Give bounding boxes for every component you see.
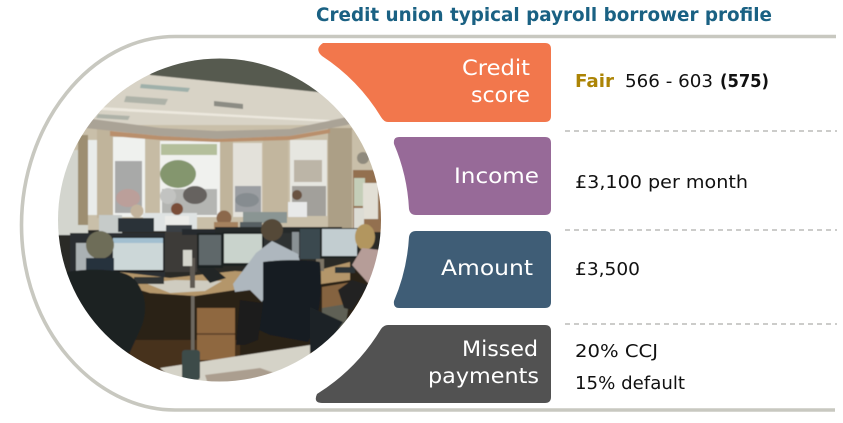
drawers [197,308,235,360]
paperwork [145,280,222,293]
monitors [76,243,94,272]
value: missed payments: 20% CCJ [575,341,658,362]
floor [127,271,368,355]
pelmet [85,116,352,139]
chair left [67,269,144,352]
value: missed payments [575,341,685,394]
windows [88,140,97,215]
value: credit score [575,71,769,92]
label panel: income [394,137,551,215]
value: credit score: Fair [575,71,614,92]
value: amount: £3,500 [575,259,640,280]
photo: call-centre office [58,58,381,382]
label panel: credit score: Credit [462,56,530,80]
cars [116,189,140,207]
workstation partition band [70,233,165,278]
ceiling [93,74,350,126]
chair centre [260,260,322,342]
noticeboard [353,170,383,232]
label panel: amount: Amount [441,256,533,280]
label panel: missed payments: payments [428,364,539,388]
woman right [355,224,375,250]
label panel: missed payments [316,325,551,403]
value: credit score: (575) [720,71,769,92]
label panel: credit score [318,43,551,122]
desk [120,262,350,296]
standing woman [292,190,302,200]
person left [86,231,114,259]
label panel: credit score: score [471,83,530,107]
back row [99,215,122,233]
foreground [310,307,343,352]
title: Credit union typical payroll borrower profile [316,4,772,26]
value: income: £3,100 per month [575,172,748,193]
label panel: income: Income [454,164,539,188]
curtains [97,126,113,218]
person centre [261,219,283,241]
label panel: amount [394,231,551,308]
back wall and left wall [74,124,373,231]
label panel: missed payments: Missed [462,337,538,361]
value: missed payments: 15% default [575,373,685,394]
value: credit score: 566 - 603 [625,71,713,92]
